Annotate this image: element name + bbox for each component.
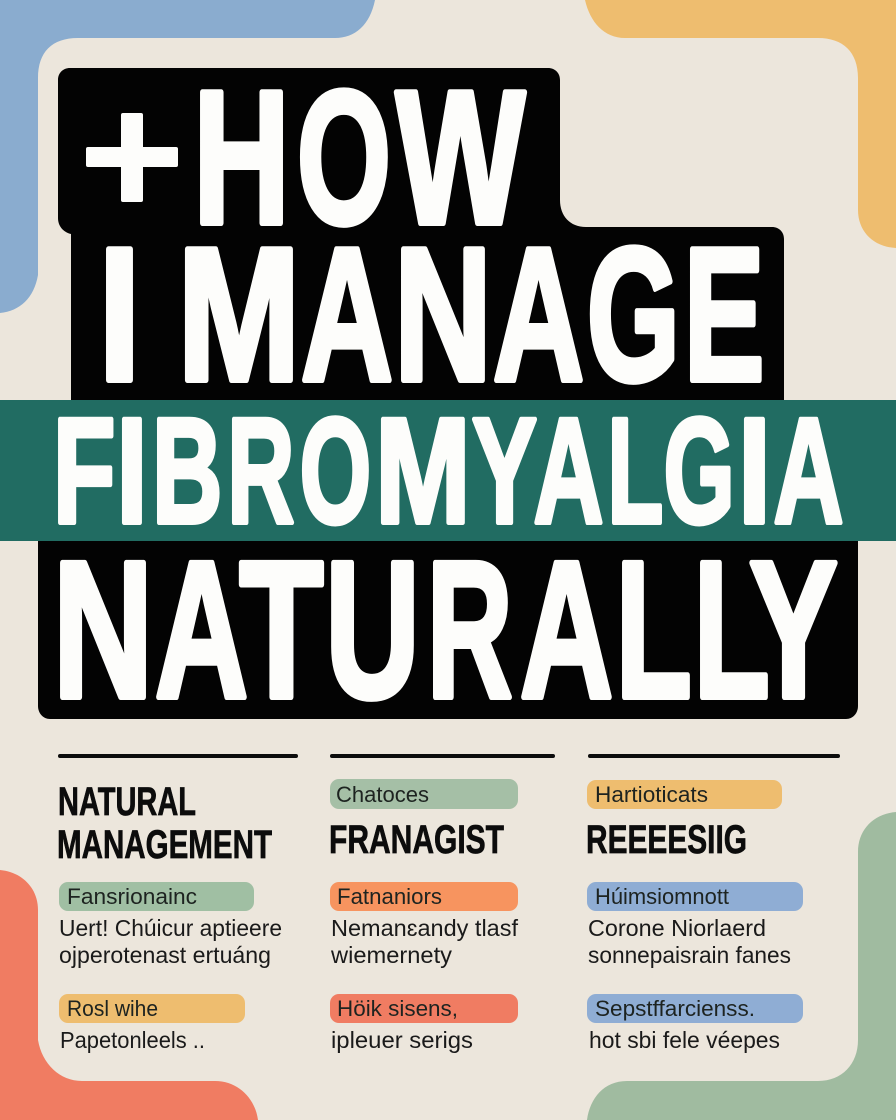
black title backing: bottom line: [38, 540, 858, 719]
corner shape: blue top-left: [0, 0, 375, 313]
title line: FIBROMYALGIA: A: [774, 386, 844, 554]
black title backing: top lines: [58, 68, 784, 402]
title line: I MANAGE: M: [177, 209, 300, 421]
title line: FIBROMYALGIA: G: [664, 386, 735, 554]
title line: I MANAGE: E: [684, 209, 764, 421]
tag: amber: Rosl wihe: [67, 996, 158, 1021]
column 1: natural management: [57, 754, 298, 1053]
heading: franagist: FRANAGIST: [329, 818, 504, 862]
title line: FIBROMYALGIA: A: [534, 386, 604, 554]
body text: Nemanɛandy tlasf: [331, 915, 519, 941]
title line: I MANAGE: A: [493, 209, 584, 421]
body text: Corone Niorlaerd: [588, 915, 766, 941]
title line: HOW: H: [193, 52, 290, 264]
title line: NATURALLY: U: [325, 521, 420, 739]
column 3: reeeesiig: [586, 754, 840, 1053]
icon: plus sign: [86, 113, 178, 202]
body text: Papetonleels ..: [60, 1027, 205, 1053]
title line: I MANAGE: N: [394, 209, 492, 421]
title line: FIBROMYALGIA: R: [227, 386, 294, 554]
tag: blue: Sepstffarcienss.: [595, 996, 755, 1021]
title line: FIBROMYALGIA: B: [152, 386, 222, 554]
title line: HOW: W: [396, 52, 526, 264]
tag: amber: Hartioticats: [595, 782, 708, 807]
column 2: franagist: [329, 754, 555, 1053]
body text: [330, 915, 519, 968]
tag: orange: Fatnaniors: [337, 884, 442, 909]
title line: FIBROMYALGIA: I: [738, 386, 771, 554]
body text: iрleuer serigs: [331, 1027, 473, 1053]
heading: natural management: NATURAL: [58, 780, 196, 824]
tag: green: Chatoces: [336, 782, 429, 807]
heading: natural management: [57, 780, 272, 867]
title line: NATURALLY: R: [427, 521, 512, 739]
title line: NATURALLY: A: [155, 521, 248, 739]
title line: I MANAGE: A: [301, 209, 393, 421]
title line: FIBROMYALGIA: L: [607, 386, 663, 554]
title line: FIBROMYALGIA: M: [375, 386, 471, 554]
title line: FIBROMYALGIA: O: [300, 386, 371, 554]
tag: coral: Höik sisens,: [337, 996, 458, 1021]
tag: orange: [330, 882, 518, 911]
title line: NATURALLY: A: [520, 521, 613, 739]
body text: wiemernety: [330, 942, 452, 968]
corner shape: coral bottom-left: [0, 870, 258, 1120]
title line: HOW: O: [297, 52, 391, 264]
corner shape: orange top-right: [585, 0, 896, 248]
corner shape: green bottom-right: [587, 812, 896, 1120]
body text: ojperotenast ertuáng: [59, 942, 271, 968]
body text: Uert! Chúicur aрtieere: [59, 915, 282, 941]
title line: NATURALLY: L: [694, 521, 770, 739]
title line: I MANAGE: I: [98, 209, 141, 421]
tag: coral: [330, 994, 518, 1023]
body text: sonnepaisrain fanes: [588, 942, 791, 968]
tag: amber: [587, 780, 782, 809]
title line: NATURALLY: L: [616, 521, 692, 739]
heading: natural management: MANAGEMENT: [57, 823, 272, 867]
tag: green: [59, 882, 254, 911]
body text: [59, 915, 282, 968]
body text: hot sbi fele véepes: [589, 1027, 780, 1053]
tag: blue: [587, 882, 803, 911]
title line: NATURALLY: N: [53, 521, 153, 739]
tag: green: [330, 779, 518, 809]
title line: I MANAGE: G: [587, 209, 680, 421]
tag: blue: [587, 994, 803, 1023]
title line: FIBROMYALGIA: Y: [472, 386, 537, 554]
body text: [588, 915, 791, 968]
title block: [0, 52, 896, 739]
title line: NATURALLY: Y: [749, 521, 838, 739]
title line: NATURALLY: T: [239, 521, 324, 739]
tag: amber: [59, 994, 245, 1023]
tag: blue: Húimsiomnott: [595, 884, 729, 909]
title line: FIBROMYALGIA: I: [116, 386, 148, 554]
title line: FIBROMYALGIA: F: [53, 386, 116, 554]
teal title band: [0, 400, 896, 541]
tag: green: Fansrionainc: [67, 884, 197, 909]
heading: reeeesiig: REEEESIIG: [586, 818, 747, 862]
